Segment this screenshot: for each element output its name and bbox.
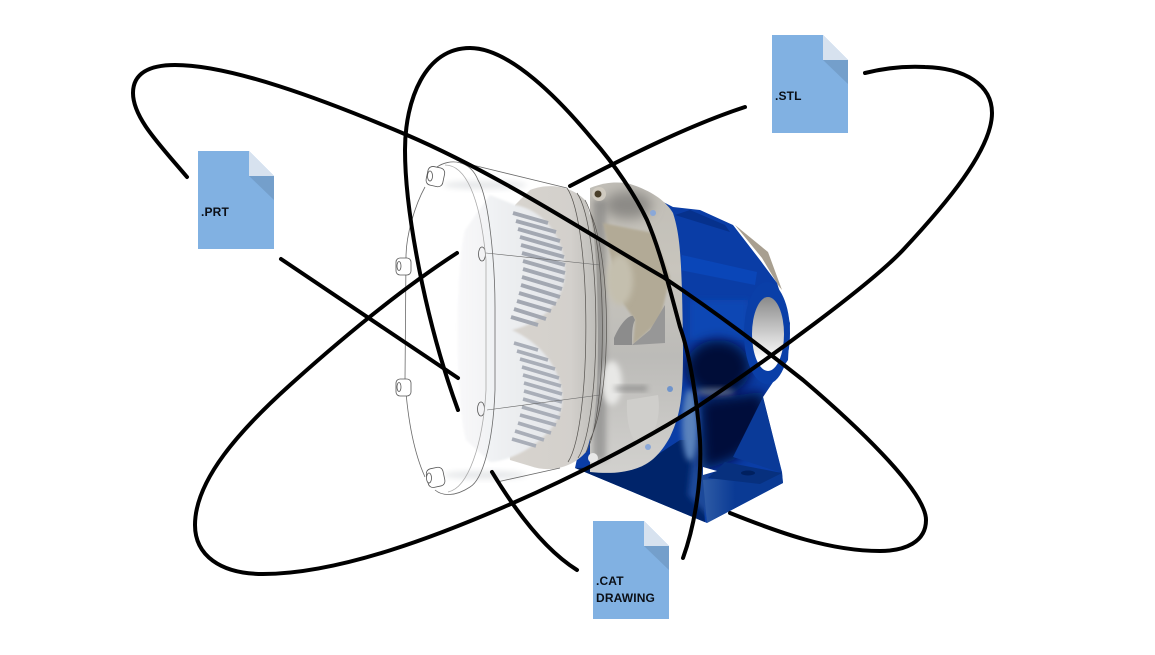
transparent end cover [405, 162, 567, 495]
file icon: .STL: .STL [775, 89, 802, 103]
pump assembly [396, 162, 800, 530]
orbit line: vertical ellipse [405, 48, 700, 558]
file icon: .CAT DRAWING: .CAT [596, 574, 624, 588]
gears [443, 181, 600, 479]
orbit line: vertical ellipse lower segment [492, 472, 577, 570]
pump body: blue housing and foot [575, 202, 790, 523]
file icon: .CAT DRAWING [593, 521, 669, 619]
file icon: .STL [772, 35, 848, 133]
orbit line: upper-left ellipse lower segment [281, 259, 458, 378]
infographic: pump with orbiting file formats [131, 35, 994, 619]
orbit line: upper-left to lower-right ellipse [133, 65, 926, 551]
beige gear shell [507, 186, 606, 469]
orbit line: upper-right to lower-left ellipse [195, 67, 992, 574]
file icon: .CAT DRAWING: DRAWING [596, 591, 655, 605]
cover bolts [396, 166, 446, 488]
inlet boss with bore [744, 282, 790, 384]
orbit line: upper-right ellipse upper segment [570, 107, 745, 186]
steel flange [588, 183, 683, 473]
file icon: .PRT [198, 151, 274, 249]
file icon: .PRT: .PRT [201, 205, 229, 219]
